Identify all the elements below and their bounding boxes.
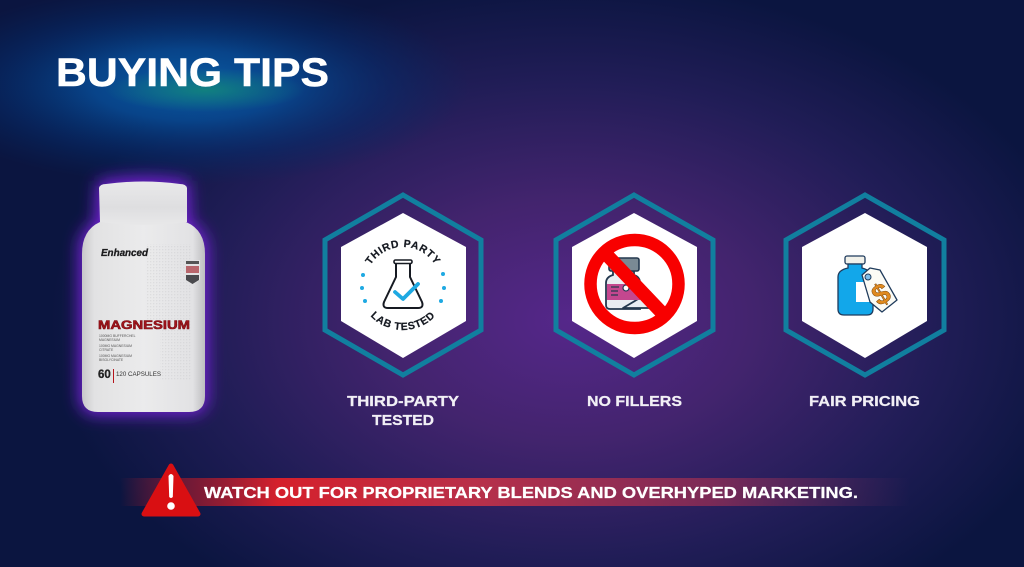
- hexagon frame: [786, 195, 944, 375]
- label: NO FILLERS: [587, 394, 682, 410]
- brand name: Enhanced: [101, 248, 149, 259]
- label: THIRD-PARTY: [347, 394, 459, 410]
- icon: warning triangle: [144, 466, 198, 514]
- hexagon frame: [325, 195, 481, 375]
- icon: third party lab tested badge: LAB TESTED: [370, 311, 434, 330]
- banner bar: [120, 478, 910, 506]
- bottle body: [82, 222, 205, 412]
- hexagon white: [572, 213, 697, 358]
- warning banner: [120, 466, 910, 514]
- panel: no fillers: [556, 195, 713, 410]
- product details: [99, 334, 136, 362]
- icon: bottle with price tag: [838, 256, 897, 315]
- product details: 100MG MAGNESIUM: [99, 344, 132, 348]
- bottle glow: [82, 180, 205, 412]
- panel: fair pricing: [786, 195, 944, 410]
- title: BUYING TIPS: [56, 51, 329, 95]
- product details: BISGLYCINATE: [99, 358, 124, 362]
- hexagon white: [802, 213, 927, 358]
- product details: MAGNESIUM: [99, 338, 120, 342]
- badge: [185, 260, 200, 285]
- product bottle: [82, 180, 205, 412]
- icon: third party lab tested badge: [360, 240, 446, 330]
- dot texture: [146, 244, 192, 380]
- icon: crossed-out bottle: [590, 240, 678, 328]
- hexagon frame: [556, 195, 713, 375]
- product details: CITRATE: [99, 348, 114, 352]
- title glow: [0, 0, 470, 185]
- product details: 1000MG BUFFERCHEL: [99, 334, 136, 338]
- capsule count: 60: [98, 369, 111, 381]
- bottle cap: [99, 182, 187, 225]
- icon: bottle with price tag: $: [867, 277, 896, 313]
- panel: third-party tested: TESTED: [372, 413, 434, 429]
- product name: MAGNESIUM: [98, 318, 190, 332]
- product bottle: 120 CAPSULES: [116, 371, 162, 378]
- hexagon white: [341, 213, 466, 358]
- icon: third party lab tested badge: THIRD PARTY: [364, 240, 441, 264]
- label: FAIR PRICING: [809, 394, 920, 410]
- warning text: WATCH OUT FOR PROPRIETARY BLENDS AND OVERHYPED MARKETING.: [204, 485, 858, 502]
- product details: 100MG MAGNESIUM: [99, 354, 132, 358]
- panel: third-party tested: [322, 192, 484, 429]
